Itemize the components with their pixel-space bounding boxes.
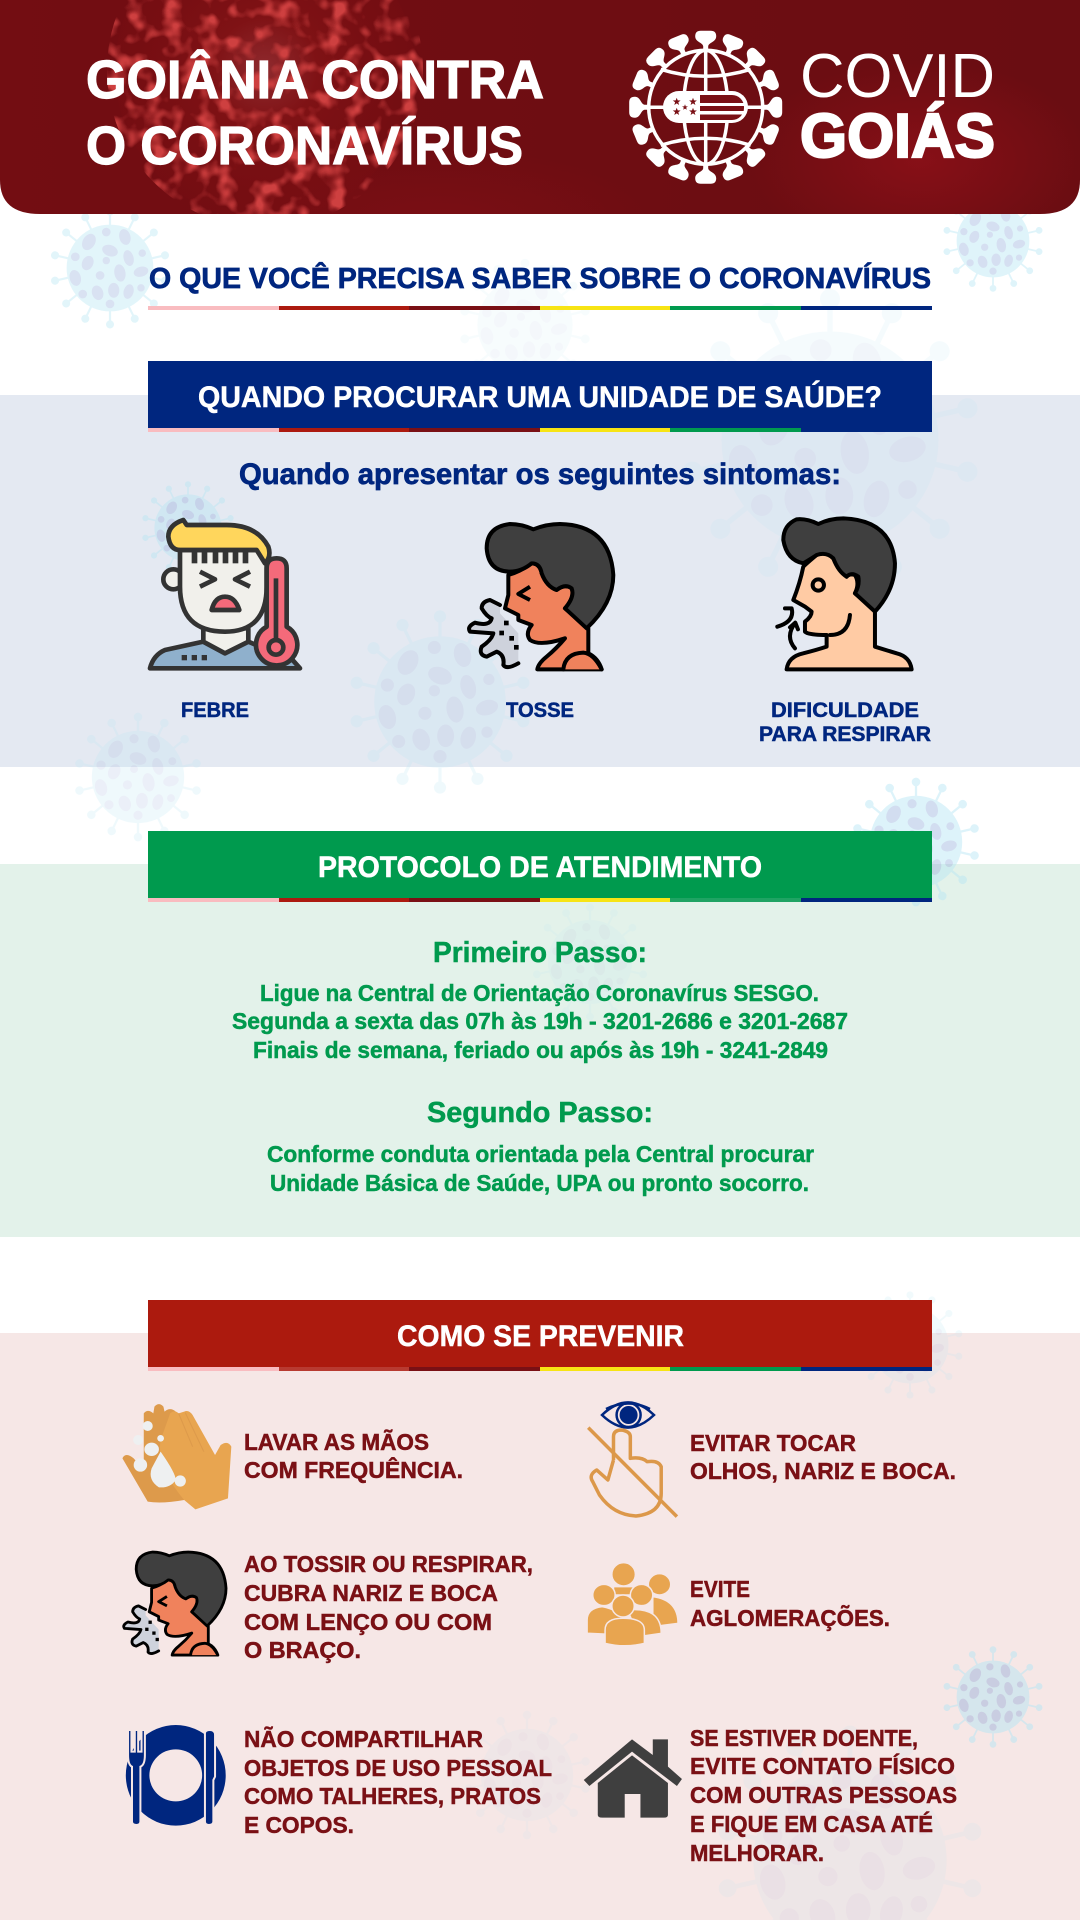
icon: breathing difficulty — [777, 518, 912, 669]
logo wordmark: COVID — [800, 42, 995, 111]
section bar: protocolo — [148, 831, 932, 902]
text: ao tossir: CUBRA NARIZ E BOCA — [244, 1580, 498, 1606]
text: evite aglomerações — [690, 1576, 890, 1631]
header banner — [0, 0, 1080, 214]
text: ao tossir — [244, 1551, 533, 1663]
panel: protocol background — [0, 864, 1080, 1237]
text: evitar tocar: EVITAR TOCAR — [690, 1430, 856, 1456]
heading: main subtitle — [148, 261, 932, 310]
icon: fever — [150, 520, 300, 668]
label: tosse: TOSSE — [506, 699, 574, 722]
text: se estiver doente: EVITE CONTATO FÍSICO — [690, 1752, 955, 1779]
text block: segundo passo: Conforme conduta orientada pela Central procurar — [267, 1141, 814, 1167]
text: evitar tocar: OLHOS, NARIZ E BOCA. — [690, 1458, 956, 1484]
heading: symptoms intro: Quando apresentar os seguintes sintomas: — [239, 458, 841, 491]
text: lavar as mãos: LAVAR AS MÃOS — [244, 1428, 429, 1455]
text: evitar tocar — [690, 1430, 956, 1484]
section bar: como se prevenir — [148, 1300, 932, 1371]
text: ao tossir: COM LENÇO OU COM — [244, 1609, 492, 1635]
logo: covid globe — [629, 31, 782, 184]
text block: primeiro passo: Finais de semana, feriado ou após às 19h - 3241-2849 — [253, 1037, 828, 1063]
logo wordmark — [800, 42, 995, 171]
text: se estiver doente: MELHORAR. — [690, 1840, 824, 1866]
text: não compartilhar — [244, 1725, 552, 1838]
section bar: como se prevenir: COMO SE PREVENIR — [397, 1320, 684, 1353]
text block: primeiro passo — [232, 937, 848, 1063]
text: não compartilhar: NÃO COMPARTILHAR — [244, 1725, 483, 1752]
text: não compartilhar: E COPOS. — [244, 1812, 354, 1838]
icon: eye — [602, 1402, 654, 1428]
title: O CORONAVÍRUS — [86, 116, 523, 176]
icon: washing hands — [122, 1404, 231, 1509]
text: lavar as mãos: COM FREQUÊNCIA. — [244, 1456, 463, 1483]
icon: cough small — [124, 1552, 226, 1655]
text block: segundo passo: Segundo Passo: — [427, 1097, 653, 1129]
text block: segundo passo — [267, 1097, 814, 1196]
text: ao tossir: AO TOSSIR OU RESPIRAR, — [244, 1551, 533, 1577]
text block: segundo passo: Unidade Básica de Saúde, UPA ou pronto socorro. — [270, 1170, 809, 1196]
label: dificuldade para respirar: PARA RESPIRAR — [759, 723, 931, 746]
text: não compartilhar: OBJETOS DE USO PESSOAL — [244, 1755, 552, 1781]
section bar: protocolo: PROTOCOLO DE ATENDIMENTO — [318, 851, 762, 884]
icon: crowd — [587, 1563, 678, 1646]
text: ao tossir: O BRAÇO. — [244, 1637, 361, 1663]
text block: primeiro passo: Ligue na Central de Orientação Coronavírus SESGO. — [260, 980, 819, 1006]
logo wordmark: GOIÁS — [800, 102, 995, 171]
heading: main subtitle: O QUE VOCÊ PRECISA SABER SOBRE O CORONAVÍRUS — [149, 261, 931, 295]
text: não compartilhar: COMO TALHERES, PRATOS — [244, 1783, 541, 1809]
section bar: quando procurar: QUANDO PROCURAR UMA UNIDADE DE SAÚDE? — [198, 380, 882, 414]
text: evite aglomerações: EVITE — [690, 1576, 750, 1602]
title: GOIÂNIA CONTRA — [86, 49, 544, 110]
label: febre: FEBRE — [181, 699, 249, 722]
text: evite aglomerações: AGLOMERAÇÕES. — [690, 1604, 890, 1631]
panel: symptoms background — [0, 395, 1080, 767]
text block: primeiro passo: Primeiro Passo: — [433, 937, 647, 969]
text block: primeiro passo: Segunda a sexta das 07h às 19h - 3201-2686 e 3201-2687 — [232, 1008, 848, 1034]
title — [86, 49, 544, 176]
text: se estiver doente: SE ESTIVER DOENTE, — [690, 1725, 918, 1751]
text: se estiver doente — [690, 1725, 957, 1866]
section bar: quando procurar — [148, 361, 932, 432]
icon: do not touch hand — [588, 1428, 677, 1517]
icon: plate and cutlery — [126, 1725, 226, 1826]
panel: prevention background — [0, 1333, 1080, 1920]
icon: cough — [469, 524, 613, 669]
label: dificuldade para respirar — [759, 699, 931, 746]
text: se estiver doente: E FIQUE EM CASA ATÉ — [690, 1810, 933, 1837]
icon: house — [584, 1739, 682, 1818]
text: lavar as mãos — [244, 1428, 463, 1483]
text: se estiver doente: COM OUTRAS PESSOAS — [690, 1782, 957, 1808]
label: dificuldade para respirar: DIFICULDADE — [771, 699, 919, 722]
